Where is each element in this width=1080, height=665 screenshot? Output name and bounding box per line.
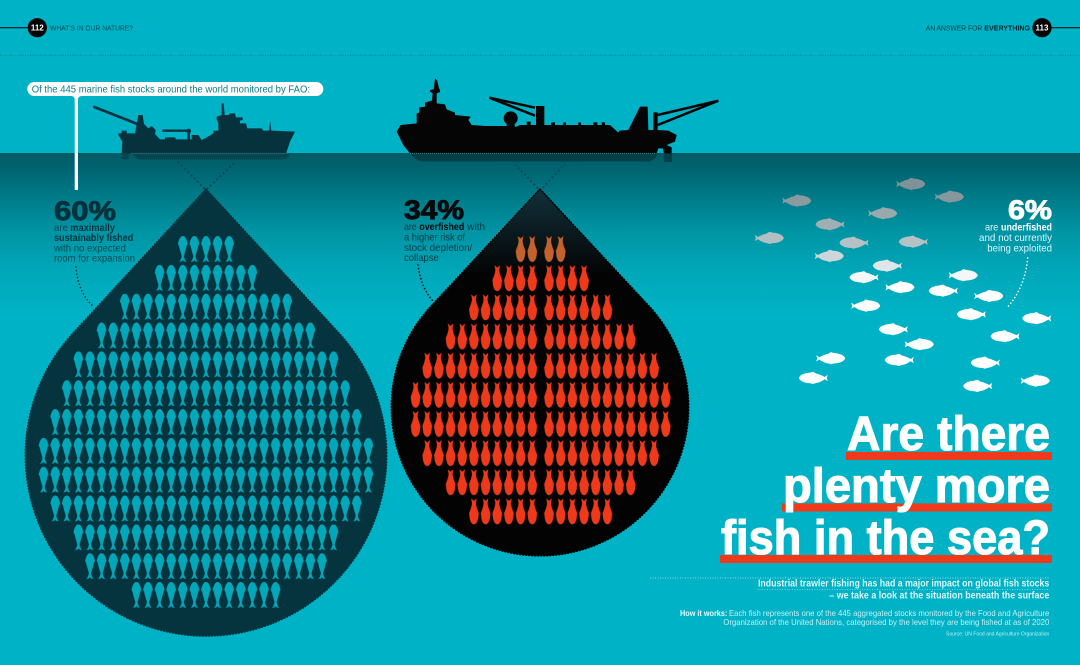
intro bubble with stem — [27, 82, 323, 190]
net outline 2 — [392, 190, 688, 555]
callout: 60 percent: with no expected — [53, 244, 126, 254]
callout: 6 percent: are — [985, 223, 999, 234]
page header left — [0, 18, 133, 37]
net fill 2 — [392, 190, 688, 555]
faded top row of fish — [515, 236, 567, 263]
title — [720, 408, 1052, 565]
subtitle: – we take a look at the situation beneath the surface — [829, 590, 1050, 601]
ship 1 underwater hull — [122, 153, 289, 159]
fish rows: 60 percent — [38, 236, 374, 609]
callout: 60 percent: maximally — [70, 223, 115, 234]
how it works note: Organization of the United Nations, categorised by the level they are being fished at as of 2020 — [723, 617, 1050, 627]
drop 2: overfished — [392, 164, 688, 555]
ship 1 booms — [93, 107, 191, 133]
page header right: EVERYTHING — [984, 24, 1030, 32]
callout: 34 percent: collapse — [404, 253, 439, 264]
page header right: 113 — [1036, 24, 1049, 32]
intro bubble with stem: Of the 445 marine fish stocks around the world monitored by FAO: — [32, 84, 310, 96]
ship 2 waterline dots — [410, 152, 657, 155]
title text: plenty more — [783, 460, 1050, 513]
page header left: WHAT'S IN OUR NATURE? — [50, 24, 133, 32]
callout: 34 percent: stock depletion/ — [404, 243, 472, 254]
callout: 34 percent: overfished — [419, 222, 464, 233]
callout: 34 percent: are — [404, 222, 417, 233]
callout: 34 percent: a higher risk of — [404, 232, 465, 244]
trawl cables 2 — [515, 164, 565, 191]
source line: Source: UN Food and Agriculture Organization — [946, 632, 1049, 638]
ship 2 underwater hull — [410, 153, 672, 162]
callout: 60 percent: are — [54, 223, 68, 234]
title text — [721, 408, 1050, 565]
how it works note: Each fish represents one of the 445 aggregated stocks monitored by the Food and Agriculture — [729, 608, 1050, 618]
ship 2 cranes — [489, 98, 718, 125]
left half fish rows — [410, 265, 538, 525]
drop 1: maximally sustainably fished — [26, 162, 386, 635]
title text: fish in the sea? — [721, 512, 1050, 565]
callout: 60 percent: 60% — [54, 196, 116, 226]
net shape 1 — [26, 190, 386, 635]
callout: 6 percent — [979, 195, 1053, 308]
free swimming fish: 6 percent — [755, 178, 1051, 392]
water depth gradient — [0, 153, 1080, 313]
ship 2 radar dome — [504, 111, 518, 127]
net fill 1 — [26, 190, 386, 635]
page header left: 112 — [31, 24, 44, 32]
how it works note: How it works: — [680, 608, 727, 618]
title text: Are there — [847, 408, 1050, 461]
callout: 34 percent: with — [466, 222, 485, 233]
callout: 34 percent — [404, 195, 485, 301]
callout: 60 percent — [53, 196, 135, 307]
right half fish rows — [543, 265, 672, 525]
how it works note — [680, 608, 1050, 627]
title underlines — [720, 452, 1052, 563]
ship 1 — [93, 103, 295, 159]
callout: 6 percent: 6% — [1008, 195, 1052, 225]
callout: 60 percent: room for expansion — [54, 254, 135, 264]
callout: 34 percent: 34% — [404, 195, 464, 225]
callout: 6 percent: underfished — [1001, 223, 1052, 234]
ship 1 hull — [118, 103, 295, 153]
ship 2 hull — [397, 78, 677, 153]
page header right: AN ANSWER FOR — [926, 24, 983, 32]
callout: 60 percent: sustainably fished — [54, 233, 133, 244]
callout: 6 percent: being exploited — [987, 243, 1052, 254]
ship 1 waterline dots — [132, 152, 288, 155]
page header right — [926, 18, 1080, 37]
callout: 6 percent: and not currently — [979, 233, 1053, 244]
subtitle — [650, 578, 1050, 601]
trawl cables 1 — [178, 162, 235, 190]
ship 2 — [397, 78, 718, 162]
